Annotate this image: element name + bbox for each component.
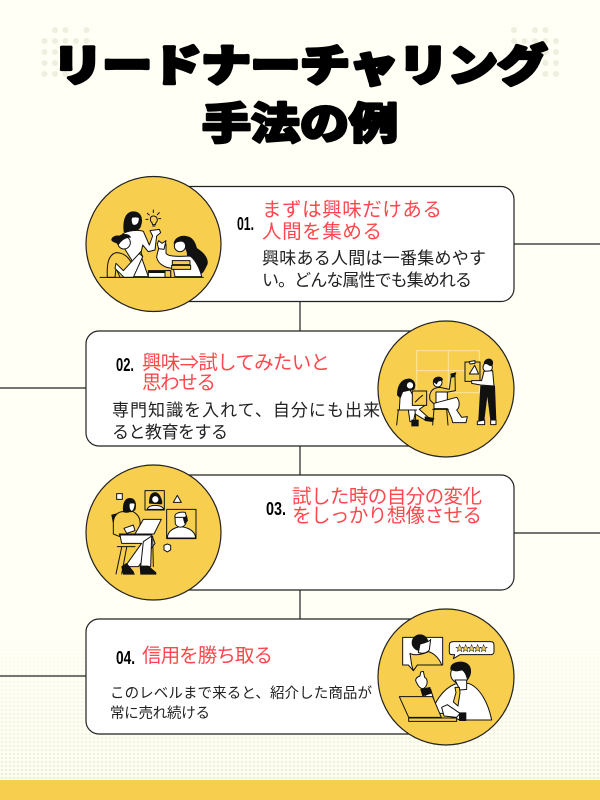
- card 2 background: [86, 331, 446, 446]
- step 1 body text: 興味ある人間は一番集めやす: [262, 249, 486, 268]
- panel: step 2: [86, 321, 514, 457]
- panel: step 3: [86, 465, 514, 600]
- step 3 heading: をしっかり想像させる: [292, 505, 482, 527]
- step 2 heading: 興味⇒試してみたいと: [142, 352, 330, 374]
- panel: step 1: [86, 176, 514, 312]
- step 1 body text: [262, 249, 486, 290]
- card 4 background: [86, 619, 446, 734]
- icon: man with laptop and star review: [378, 609, 514, 745]
- icon: woman on a video call: [86, 465, 221, 600]
- title: リードナーチャリング: [53, 42, 547, 91]
- step 4 number: 04.: [116, 648, 135, 668]
- step 1 heading: 人間を集める: [262, 221, 382, 243]
- step 3 heading: 試した時の自分の変化: [292, 486, 482, 508]
- step 1 heading: まずは興味だけある: [262, 199, 442, 221]
- card 1 background: [130, 186, 514, 302]
- step 1 number: 01.: [237, 214, 254, 234]
- step 4 heading: 信用を勝ち取る: [142, 645, 273, 667]
- title: [53, 42, 547, 149]
- icon: people presenting on a board: [378, 321, 514, 457]
- card 3 background: [150, 475, 514, 590]
- step 2 number: 02.: [116, 355, 134, 375]
- step 4 body text: 常に売れ続ける: [110, 705, 210, 722]
- connector lines: [0, 244, 600, 676]
- step 3 heading: [292, 486, 482, 527]
- bottom band: [0, 780, 600, 800]
- step 2 body text: [112, 401, 380, 442]
- icon: man with laptop and star review: ★★★★★: [456, 644, 488, 653]
- title: 手法の例: [202, 101, 398, 149]
- step 4 body text: このレベルまで来ると、紹介した商品が: [110, 685, 372, 702]
- step 2 heading: [142, 352, 330, 394]
- step 2 body text: ると教育をする: [112, 423, 228, 442]
- step 2 heading: 思わせる: [142, 372, 216, 394]
- step 2 body text: 専門知識を入れて、自分にも出来: [112, 401, 380, 420]
- step 1 heading: [262, 199, 442, 243]
- step 3 number: 03.: [266, 499, 286, 519]
- panel: step 4: [86, 609, 514, 745]
- step 1 body text: い。どんな属性でも集めれる: [262, 271, 472, 290]
- icon: three people with a lightbulb: [86, 176, 221, 312]
- step 4 body text: [110, 685, 372, 722]
